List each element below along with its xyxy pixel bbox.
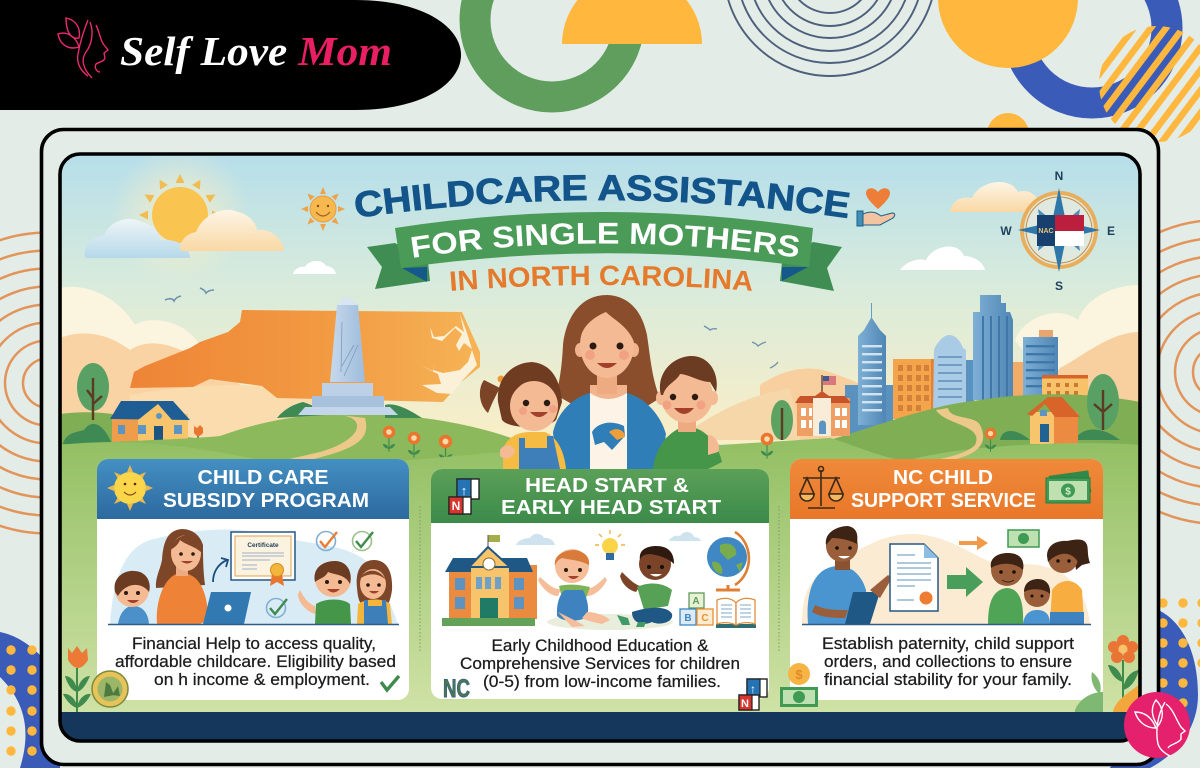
foreground ground <box>60 437 1140 712</box>
body text: child care subsidy <box>115 634 396 689</box>
heart and hand icon <box>857 188 895 226</box>
blue cloud <box>85 219 190 258</box>
ribbon banner: FOR SINGLE MOTHERS <box>411 222 799 258</box>
orange arrow <box>959 536 988 550</box>
boy <box>653 356 722 469</box>
header: child support: SUPPORT SERVICE <box>851 490 1036 512</box>
body text: child support <box>822 634 1074 689</box>
bush left <box>63 424 112 444</box>
bottom-left blue shape with dots <box>0 632 60 768</box>
clouds <box>516 534 555 545</box>
abc blocks: C <box>701 613 709 624</box>
check marks <box>266 532 373 618</box>
green ring <box>475 0 629 97</box>
NC logo: NC <box>443 675 470 703</box>
body text: child care subsidy: Financial Help to access quality, <box>132 634 376 653</box>
icon: smiling sun <box>107 465 153 511</box>
illustration: family applying for subsidy <box>108 529 399 624</box>
card: head start <box>431 469 769 703</box>
leaves by card corner <box>1075 672 1103 712</box>
small yellow circle <box>987 113 1029 155</box>
header: child care subsidy <box>97 459 409 519</box>
header: child support <box>790 459 1103 519</box>
panel border <box>60 154 1140 741</box>
header: child support: NC CHILD <box>893 467 993 489</box>
tree left <box>77 363 109 420</box>
icon: blocks bottom right: ↑ <box>750 682 756 696</box>
abc blocks: A <box>692 596 700 607</box>
header: head start: HEAD START & <box>525 475 689 497</box>
left back hill <box>62 412 196 445</box>
North Carolina map <box>130 310 480 402</box>
body text: head start <box>460 636 740 691</box>
arrow to certificate <box>213 558 228 582</box>
peach ridge behind family <box>690 388 800 440</box>
far cloud right <box>1015 285 1138 370</box>
icon: blocks bottom right: N <box>741 698 749 710</box>
flowers row left <box>382 426 452 458</box>
birds left <box>165 288 214 301</box>
state seal <box>92 671 128 707</box>
icon: cash stack: $ <box>1065 486 1071 498</box>
tulip plant <box>63 646 91 712</box>
peach cloud right <box>950 182 1042 212</box>
certificate: Certificate <box>247 542 279 549</box>
abc blocks: B <box>684 613 692 624</box>
centre green hill <box>102 415 511 461</box>
header: head start <box>431 469 769 523</box>
small white cloud <box>293 261 336 274</box>
flower plant right <box>1108 635 1140 712</box>
main illustration panel <box>60 145 1140 742</box>
far cloud left <box>62 287 198 351</box>
peach hill mid-right <box>760 368 858 440</box>
compass with NC flag: S <box>1055 279 1063 293</box>
family group <box>480 295 722 469</box>
header: child care subsidy: CHILD CARE <box>198 467 328 489</box>
compass with NC flag: E <box>1107 224 1115 238</box>
blue ring <box>1017 0 1167 103</box>
family <box>988 540 1090 624</box>
school with flag <box>795 375 851 436</box>
right orange arcs <box>1067 220 1200 524</box>
illustration: child support <box>802 526 1091 624</box>
school <box>442 535 537 626</box>
card: child support <box>790 459 1103 700</box>
birds right <box>704 326 778 368</box>
girl <box>480 362 566 469</box>
coin and cash near card <box>780 663 818 707</box>
mother with laptop <box>156 529 251 624</box>
icon: blocks bottom right <box>739 679 767 710</box>
cash bill <box>1008 530 1039 547</box>
body text: child care subsidy: affordable childcare. Eligibility based <box>115 652 396 671</box>
outer frame <box>42 130 1158 764</box>
ribbon banner <box>367 212 842 291</box>
path left <box>285 415 366 460</box>
compass with NC flag: W <box>1000 224 1012 238</box>
white cloud right <box>900 246 985 270</box>
floor shadow <box>547 614 673 630</box>
big tree right <box>1087 374 1119 430</box>
peach cloud <box>180 210 284 251</box>
sky <box>60 154 1140 444</box>
concentric line circles <box>724 0 936 76</box>
logo wordmark: Self Love Mom <box>120 28 392 74</box>
globe <box>707 532 749 590</box>
striped circle <box>1099 26 1200 142</box>
baby left <box>538 549 610 627</box>
small tree right <box>771 400 793 440</box>
skyline <box>845 295 1088 435</box>
pink circle logo badge <box>1124 692 1190 758</box>
left orange arcs <box>0 232 198 534</box>
icon: alphabet blocks: N <box>452 499 460 513</box>
body text: child support: financial stability for your family. <box>824 670 1072 689</box>
icon: alphabet blocks: ↑ <box>461 483 467 498</box>
house right <box>1000 397 1120 444</box>
card: child care subsidy <box>97 459 409 700</box>
body text: child care subsidy: on h income & employment. <box>154 670 370 689</box>
bottom navy band <box>60 712 1140 742</box>
compass with NC flag: N <box>1055 169 1063 183</box>
compass with NC flag <box>1000 169 1115 293</box>
yellow half circle <box>562 0 702 44</box>
big sun <box>139 174 221 243</box>
coin and cash near card: $ <box>795 667 803 682</box>
compass with NC flag: NAC <box>1038 228 1054 235</box>
icon: alphabet blocks <box>449 479 479 514</box>
illustration: school and children <box>442 530 756 630</box>
lightbulb <box>595 530 625 560</box>
green arrow <box>947 567 983 597</box>
tulip near house <box>194 425 203 438</box>
bushes by monument <box>277 402 422 418</box>
body text: child support: Establish paternity, child support <box>822 634 1074 653</box>
toddler right <box>617 546 674 627</box>
document <box>890 544 938 611</box>
obelisk monument <box>298 296 398 415</box>
icon: green check <box>381 676 399 690</box>
open book <box>716 598 756 628</box>
header logo bar <box>0 0 461 110</box>
icon: scales of justice <box>800 466 843 508</box>
peach hill left <box>62 333 241 414</box>
right flowers <box>761 428 996 459</box>
house left <box>110 401 190 444</box>
body text: child support: orders, and collections to ensure <box>824 652 1072 671</box>
path right <box>935 408 983 460</box>
title: childcare assistance <box>355 174 850 291</box>
certificate <box>231 532 295 586</box>
body text: head start: Early Childhood Education & <box>492 636 709 655</box>
header: head start: EARLY HEAD START <box>501 497 721 519</box>
peach hill right <box>1058 332 1138 402</box>
children right <box>298 560 392 624</box>
header: child care subsidy: SUBSIDY PROGRAM <box>163 490 369 512</box>
body text: head start: (0-5) from low-income families. <box>483 672 721 691</box>
icon: cash stack <box>1046 470 1091 503</box>
abc blocks <box>680 593 713 625</box>
bottom-right blue shape with dots <box>1110 598 1200 768</box>
boy left <box>115 571 150 624</box>
case worker <box>808 526 892 624</box>
mother <box>553 295 666 469</box>
sun glow <box>122 156 238 268</box>
right hills <box>834 394 1138 459</box>
yellow circle <box>938 0 1078 68</box>
title line 3: IN NORTH CAROLINA <box>450 266 752 291</box>
dotted dividers <box>420 506 779 651</box>
logo icon: woman profile with leaves <box>58 18 108 78</box>
title line 1: CHILDCARE ASSISTANCE <box>355 174 850 218</box>
smiling small sun <box>301 187 345 231</box>
body text: head start: Comprehensive Services for children <box>460 654 740 673</box>
